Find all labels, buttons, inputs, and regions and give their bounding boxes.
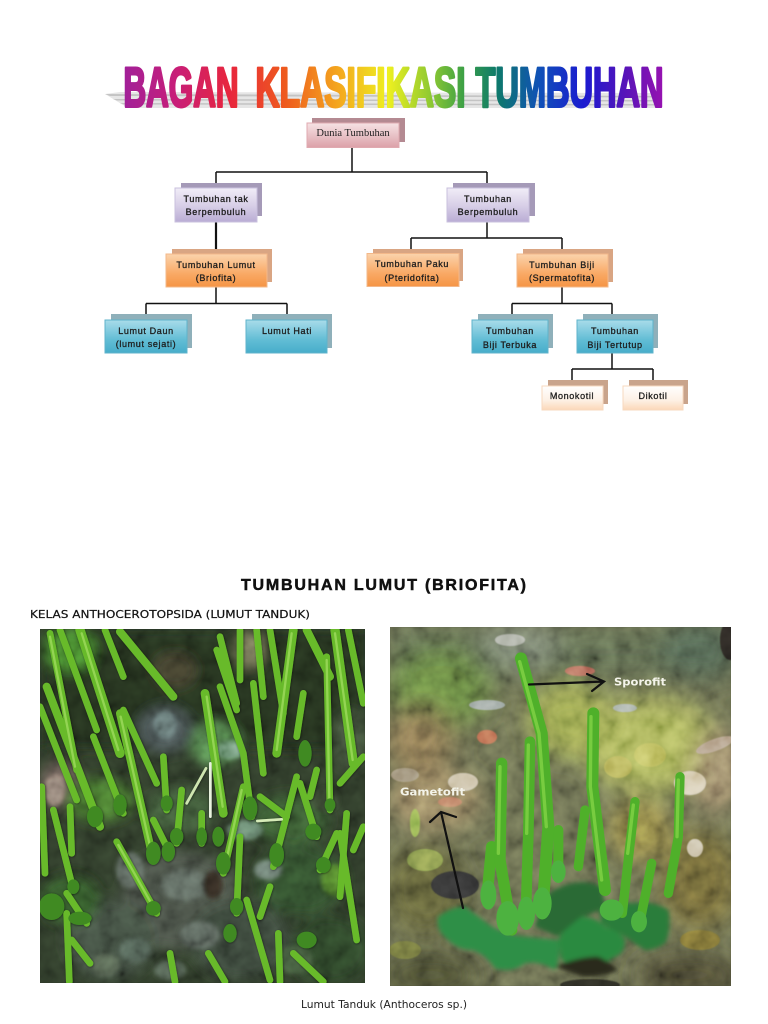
box: Tumbuhan Biji: Tumbuhan Biji — [529, 260, 595, 270]
section heading: TUMBUHAN LUMUT (BRIOFITA) — [241, 577, 526, 594]
box: Monokotil — [542, 380, 608, 410]
photo 2 thallus — [438, 658, 680, 977]
box: Dikotil — [623, 380, 688, 410]
box: Dunia Tumbuhan — [307, 118, 405, 148]
box: Dikotil: Dikotil — [638, 391, 668, 401]
box: Lumut Daun: Lumut Daun — [118, 326, 174, 336]
box: Lumut Daun — [105, 314, 192, 353]
box: Tumbuhan Paku — [367, 249, 463, 286]
photo 2 texture — [390, 627, 731, 986]
arrow: Gametofit — [430, 812, 463, 908]
box: Tumbuhan tak Berpembuluh: Tumbuhan tak — [184, 194, 248, 204]
box: Dunia Tumbuhan: Dunia Tumbuhan — [316, 128, 390, 139]
box: Tumbuhan Paku: (Pteridofita) — [385, 273, 439, 283]
box: Tumbuhan Berpembuluh: Tumbuhan — [464, 194, 512, 204]
photo 2 details — [389, 620, 740, 991]
photo: hornwort close-up — [39, 628, 370, 985]
title text: BAGAN — [124, 56, 238, 118]
photo 1 leaves — [45, 711, 349, 980]
box: Tumbuhan Biji — [517, 249, 613, 287]
box: Lumut Hati: Lumut Hati — [262, 326, 312, 336]
photo 1 texture — [40, 629, 365, 983]
box: Tumbuhan Biji Tertutup — [577, 314, 658, 353]
photo 2 sporophytes — [487, 658, 680, 930]
photo 1 background — [40, 628, 370, 985]
label: Gametofit: Gametofit — [400, 786, 465, 798]
title text — [124, 56, 664, 118]
photo 2 background — [390, 627, 731, 986]
box: Tumbuhan Biji Tertutup: Biji Tertutup — [587, 340, 643, 350]
box: Tumbuhan Berpembuluh: Berpembuluh — [458, 207, 518, 217]
box: Tumbuhan Biji Tertutup: Tumbuhan — [591, 326, 639, 336]
box: Tumbuhan Lumut: (Briofita) — [196, 273, 236, 283]
photo: hornwort with labels — [390, 627, 731, 986]
box: Tumbuhan Lumut: Tumbuhan Lumut — [176, 260, 256, 270]
box: Tumbuhan Biji Terbuka: Biji Terbuka — [483, 340, 537, 350]
box: Tumbuhan Lumut — [166, 249, 272, 287]
box: Tumbuhan Paku: Tumbuhan Paku — [375, 259, 449, 269]
class label: KELAS ANTHOCEROTOPSIDA (LUMUT TANDUK) — [30, 609, 310, 621]
organization chart — [105, 118, 688, 410]
photo 1 sporophytes — [39, 630, 363, 982]
connector lines — [146, 148, 653, 386]
box: Tumbuhan Biji Terbuka: Tumbuhan — [486, 326, 534, 336]
title — [105, 56, 664, 118]
box: Tumbuhan Biji Terbuka — [472, 314, 553, 353]
box: Tumbuhan tak Berpembuluh — [175, 183, 262, 222]
photo caption: Lumut Tanduk (Anthoceros sp.) — [301, 999, 467, 1011]
box: Tumbuhan tak Berpembuluh: Berpembuluh — [186, 207, 246, 217]
title text: KLASIFIKASI — [256, 56, 466, 118]
title shadow — [105, 92, 660, 108]
box: Monokotil: Monokotil — [550, 391, 594, 401]
box: Lumut Daun: (lumut sejati) — [116, 339, 176, 349]
arrow: Sporofit — [529, 674, 604, 691]
box: Tumbuhan Berpembuluh — [447, 183, 535, 222]
box: Lumut Hati — [246, 314, 332, 353]
box: Tumbuhan Biji: (Spermatofita) — [529, 273, 595, 283]
label: Sporofit: Sporofit — [614, 676, 666, 688]
